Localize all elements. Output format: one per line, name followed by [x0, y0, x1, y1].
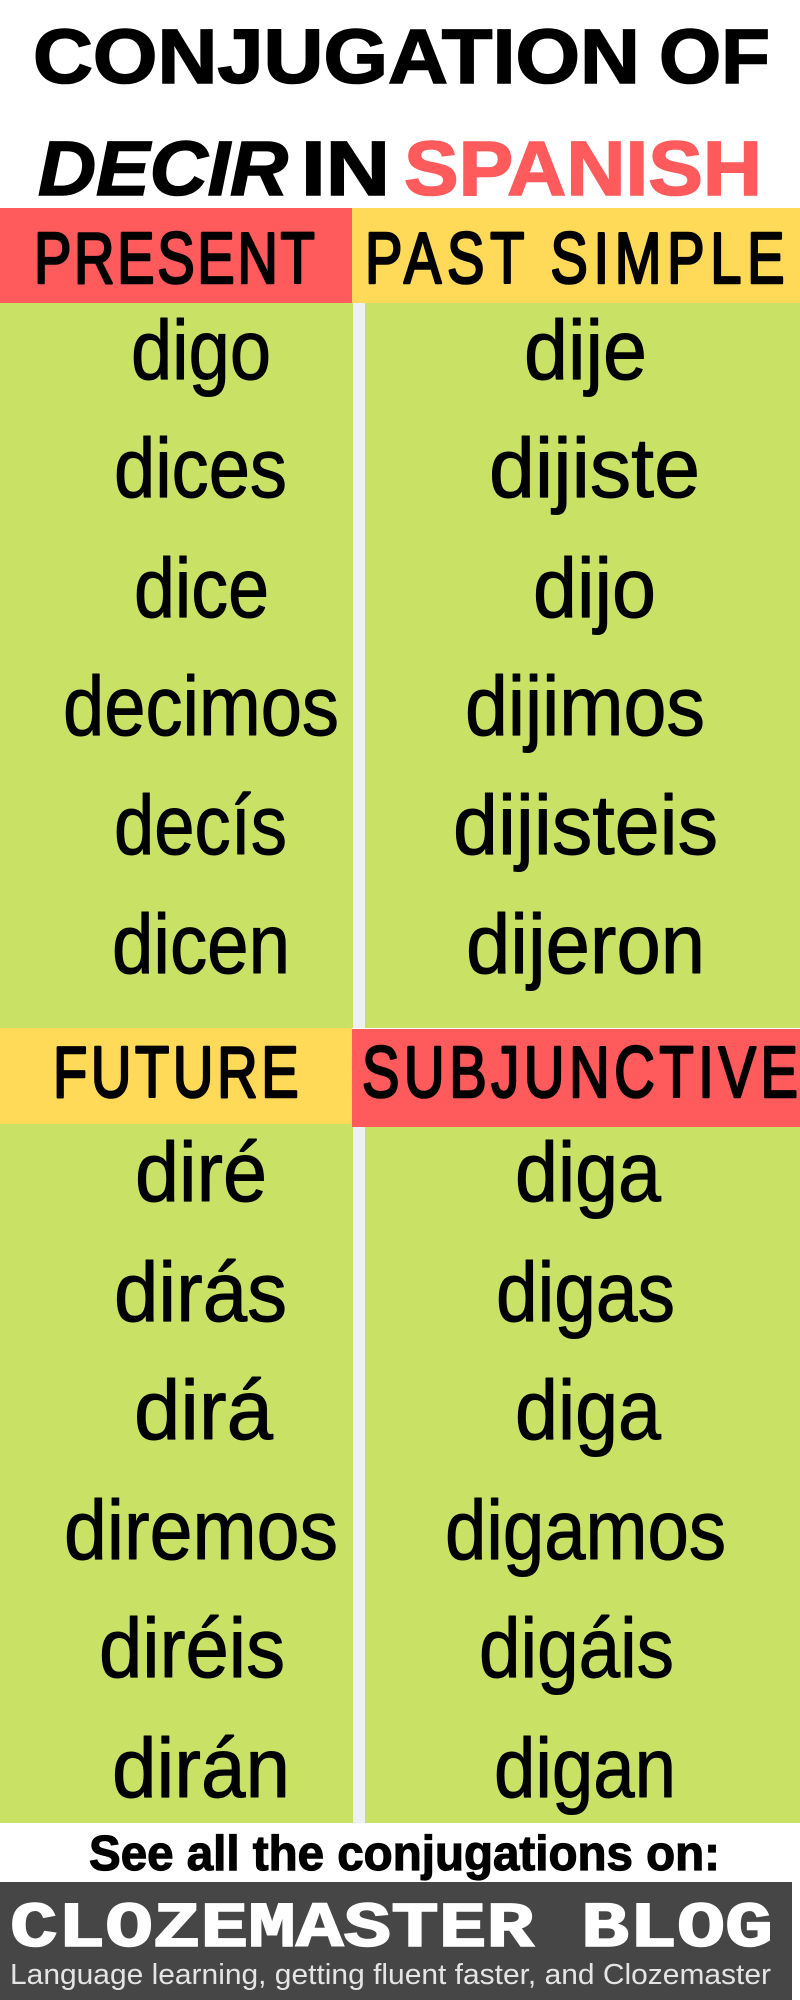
word list: past simple: dije [524, 303, 647, 397]
word list: present [63, 303, 339, 991]
logo wordmark: CLOZEMASTER [10, 1894, 535, 1966]
word list: subjunctive: digáis [479, 1601, 674, 1695]
panel: present [0, 208, 353, 1028]
word list: present: decís [114, 778, 287, 872]
word list: future: diremos [64, 1483, 338, 1577]
panel: future [0, 1028, 353, 1823]
word list: past simple [453, 303, 718, 991]
heading: past simple: PAST SIMPLE [365, 218, 785, 299]
heading: present: PRESENT [34, 218, 315, 299]
panel: past simple [352, 208, 800, 1028]
word list: future: diréis [99, 1601, 285, 1695]
word list: present: dice [134, 541, 269, 635]
word list: subjunctive: digamos [445, 1483, 726, 1577]
word list: subjunctive [445, 1125, 726, 1815]
word list: subjunctive: digan [494, 1721, 676, 1815]
word list: past simple: dijiste [489, 421, 700, 515]
logo banner: clozemaster blog [0, 1882, 792, 2000]
heading: future [0, 1028, 352, 1124]
word list: present: dicen [112, 897, 290, 991]
word list: subjunctive: digas [496, 1245, 675, 1339]
word list: future: dirás [114, 1245, 287, 1339]
word list: future [64, 1125, 338, 1815]
heading: future: FUTURE [53, 1032, 299, 1113]
logo wordmark [10, 1894, 773, 1966]
heading: present [0, 208, 352, 303]
word list: past simple: dijimos [465, 659, 705, 753]
title: SPANISH [404, 126, 762, 212]
title: OF [659, 14, 770, 100]
title: CONJUGATION [33, 14, 640, 100]
divider: top columns [353, 303, 365, 1028]
title: DECIR [38, 126, 288, 212]
word list: subjunctive: diga [515, 1125, 661, 1219]
heading: subjunctive: SUBJUNCTIVE [362, 1032, 798, 1113]
logo tagline: Language learning, getting fluent faster, and Clozemaster [10, 1959, 771, 1991]
word list: present: decimos [63, 659, 339, 753]
word list: past simple: dijeron [466, 897, 705, 991]
word list: subjunctive: diga [515, 1363, 661, 1457]
word list: present: digo [131, 303, 271, 397]
word list: future: diré [135, 1125, 267, 1219]
logo wordmark: BLOG [581, 1894, 773, 1966]
title [33, 14, 770, 212]
word list: present: dices [114, 421, 287, 515]
word list: future: dirán [112, 1721, 290, 1815]
word list: past simple: dijo [533, 541, 656, 635]
panel: subjunctive [352, 1029, 800, 1823]
title: IN [301, 126, 390, 212]
call to action: See all the conjugations on: [89, 1827, 720, 1881]
word list: past simple: dijisteis [453, 778, 718, 872]
word list: future: dirá [134, 1363, 273, 1457]
divider: bottom columns [353, 1127, 365, 1823]
